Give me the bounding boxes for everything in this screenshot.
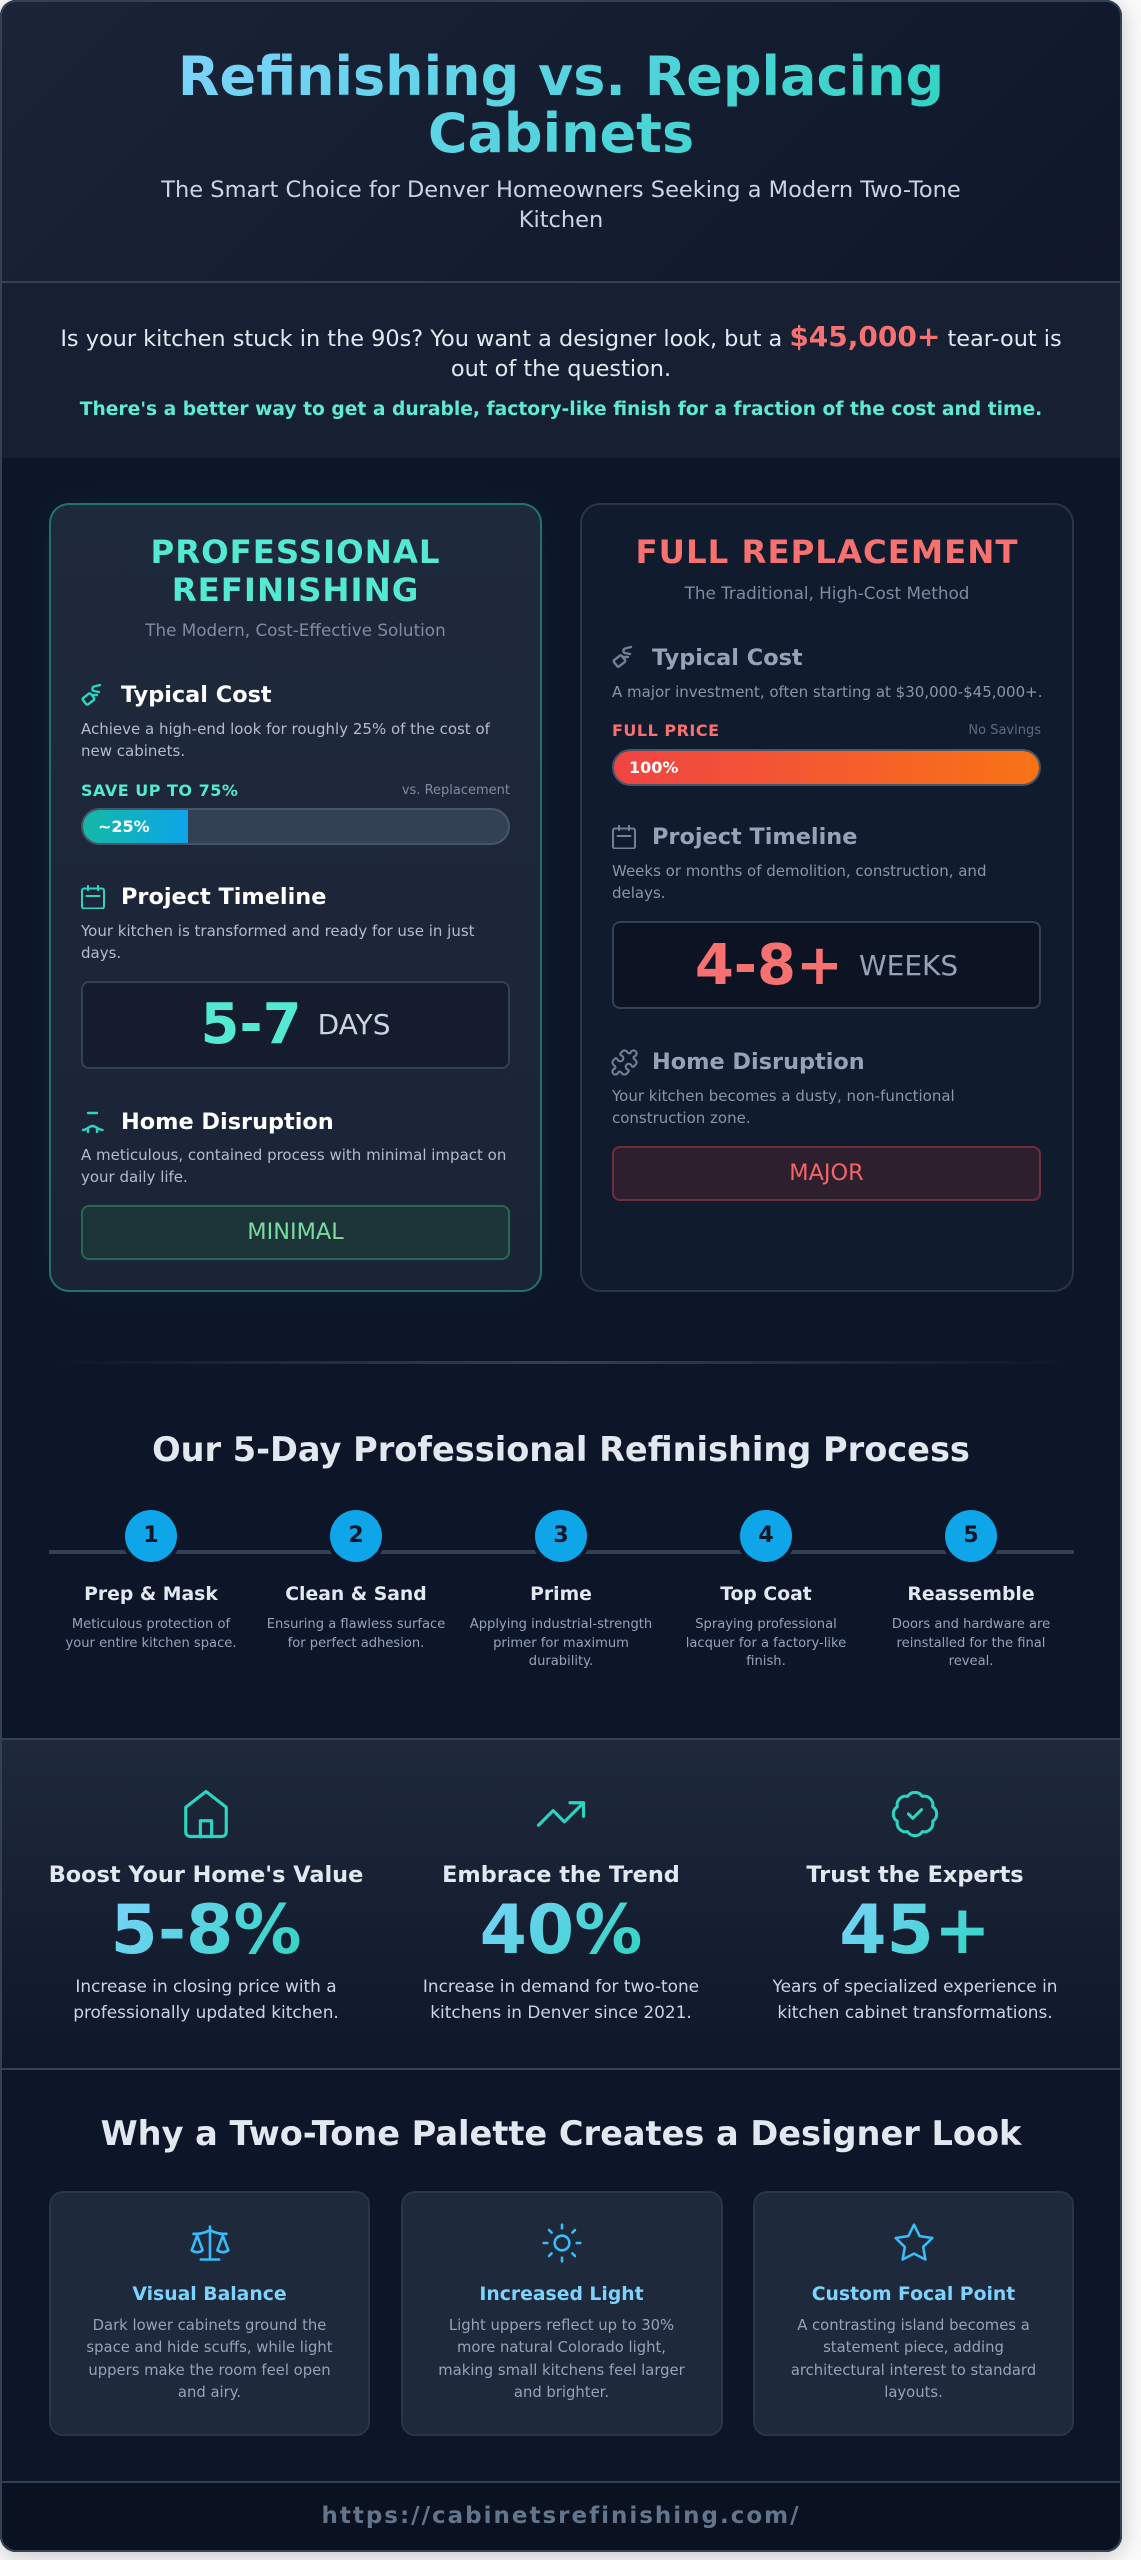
stat description [73,1976,339,2022]
step description: lacquer for a factory-like [686,1636,846,1651]
intro highlight: There's a better way to get a durable, factory-like finish for a fraction of the cost and time. [80,399,1042,420]
stat description: Years of specialized experience in [773,1976,1057,1996]
stat box: 4-8+ weeks: 4-8+ [695,932,843,998]
website url: https://cabinetsrefinishing.com/ [321,2503,801,2529]
step description: durability. [529,1654,593,1669]
description: Your kitchen becomes a dusty, non-functional [612,1087,955,1105]
description: Your kitchen is transformed and ready for use in just [81,922,475,940]
description: Weeks or months of demolition, construction, and [612,862,986,880]
title: Refinishing vs. Replacing [178,45,944,108]
stat description [423,1976,699,2022]
step title: Prime [530,1584,592,1605]
feature: home disruption [81,1109,510,1260]
icon: home [184,1790,228,1838]
heading: Home Disruption [121,1109,334,1135]
step description [267,1617,445,1651]
section heading: Why a Two-Tone Palette Creates a Designer Look [101,2114,1021,2153]
step 2 [267,1510,445,1651]
feature: home disruption [611,1049,1041,1201]
icon: calendar [81,885,105,909]
step number: 4 [758,1523,774,1548]
intro text [60,320,1062,382]
step description: reinstalled for the final [897,1636,1045,1651]
card heading: PROFESSIONAL [150,533,441,571]
description [81,922,475,962]
intro text: Is your kitchen stuck in the 90s? You want a designer look, but a $45,000+ tear-out is [60,320,1062,353]
stat description: kitchen cabinet transformations. [777,2002,1053,2022]
icon: calendar [612,825,636,849]
title [178,45,944,164]
card description: more natural Colorado light, [457,2339,666,2356]
progress bar: 25% [81,808,510,845]
subtitle: Kitchen [519,207,603,233]
description: A meticulous, contained process with minimal impact on [81,1146,506,1164]
subtitle [161,177,961,233]
step number: 5 [963,1523,979,1548]
step description: primer for maximum [493,1636,629,1651]
card description: A contrasting island becomes a [797,2317,1030,2334]
step description: reveal. [949,1654,993,1669]
title: Cabinets [428,102,694,164]
description [81,720,490,760]
card description: uppers make the room feel open [88,2362,331,2379]
stat box: 4-8+ weeks: WEEKS [859,948,958,982]
status: major [612,1146,1041,1201]
progress bar: 100% [612,749,1041,786]
feature: project timeline [612,824,1041,1009]
card: increased light [400,2191,722,2436]
step number [330,1510,382,1562]
step description: Spraying professional [695,1617,837,1632]
description: Achieve a high-end look for roughly 25% of the cost of [81,720,490,738]
step description [470,1617,652,1669]
step description: your entire kitchen space. [66,1636,236,1651]
stat description: kitchens in Denver since 2021. [430,2002,692,2022]
price label: FULL PRICE [612,721,720,740]
progress bar: 100%: 100% [629,758,678,777]
card description [755,2315,1072,2405]
status: minimal: MINIMAL [247,1219,344,1245]
card title: Increased Light [479,2284,644,2305]
description [81,1146,506,1186]
icon: puzzle [611,1049,638,1076]
card description [51,2315,368,2405]
footer [0,2481,1122,2552]
savings label: SAVE UP TO 75% [81,781,238,800]
card heading [150,533,441,609]
step number [535,1510,587,1562]
card description: architectural interest to standard [791,2362,1036,2379]
card description [402,2315,720,2405]
step description: finish. [746,1654,786,1669]
step description: Meticulous protection of [72,1617,230,1632]
step number [945,1510,997,1562]
step number [125,1510,177,1562]
heading: Typical Cost [121,682,272,708]
description: your daily life. [81,1168,188,1186]
step number [740,1510,792,1562]
icon: money [82,684,102,706]
stat description: Increase in demand for two-tone [423,1976,699,1996]
card heading: FULL REPLACEMENT [636,533,1018,571]
status: major: MAJOR [789,1160,864,1186]
stat: experience [745,1791,1085,2026]
stat value: 45+ [839,1891,991,1970]
comparison note: vs. Replacement [402,783,510,798]
step description [66,1617,236,1651]
stat box: 5-7 days [81,981,510,1069]
card description: Light uppers reflect up to 30% [449,2317,674,2334]
card description: statement piece, adding [823,2339,1004,2356]
stat box: 4-8+ weeks [612,921,1041,1009]
stat title: Embrace the Trend [442,1862,680,1888]
intro text: out of the question. [451,356,671,382]
description: A major investment, often starting at $30,000-$45,000+. [612,683,1042,701]
description: days. [81,944,121,962]
card subtitle: The Modern, Cost-Effective Solution [145,620,446,640]
step description [892,1617,1050,1669]
icon: scale [188,2221,232,2265]
step title: Clean & Sand [285,1584,427,1605]
icon: minimal disruption [82,1112,104,1134]
icon: money [612,646,632,668]
card: visual balance [49,2191,370,2436]
panel: professional refinishing [49,503,542,1292]
stat description: professionally updated kitchen. [73,2002,339,2022]
status: minimal [81,1205,510,1260]
heading: Project Timeline [652,824,857,850]
stat description [745,1973,1085,2025]
feature: project timeline [81,884,510,1069]
panel: two-tone palette [0,2070,1122,2482]
header panel [0,0,1122,282]
process heading: Our 5-Day Professional Refinishing Process [152,1430,970,1469]
stat box: 5-7 days: 5-7 [200,992,302,1057]
step number: 3 [553,1523,569,1548]
card title: Visual Balance [132,2284,287,2305]
card description: making small kitchens feel larger [438,2362,685,2379]
step number: 2 [348,1523,364,1548]
stat box: 5-7 days: DAYS [318,1008,391,1041]
description: construction zone. [612,1109,751,1127]
stat value: 5-8% [110,1891,301,1970]
card: custom focal point [753,2191,1074,2436]
panel: full replacement [580,503,1074,1292]
card subtitle: The Traditional, High-Cost Method [685,583,969,603]
feature: typical cost [81,682,510,845]
step number: 1 [143,1523,159,1548]
intro panel [0,281,1122,458]
stat description: Increase in closing price with a [75,1976,337,1996]
progress bar: 25%: ~25% [98,817,150,836]
card description: layouts. [884,2384,943,2401]
description: delays. [612,884,666,902]
stat title: Trust the Experts [806,1862,1024,1888]
step description: Applying industrial-strength [470,1617,652,1632]
icon: sun [540,2221,584,2265]
stat: two-tone trend [423,1801,699,2022]
step 4 [686,1510,846,1669]
step title: Reassemble [907,1584,1035,1605]
step description: for perfect adhesion. [288,1636,424,1651]
step 1 [66,1510,236,1651]
description [612,862,986,902]
step title: Top Coat [720,1584,812,1605]
card heading: REFINISHING [172,571,419,609]
stat: home value [49,1790,363,2022]
step 3 [470,1510,652,1669]
heading: Typical Cost [652,645,803,671]
heading: Project Timeline [121,884,326,910]
card title: Custom Focal Point [812,2284,1015,2305]
stat title: Boost Your Home's Value [49,1862,363,1888]
icon: badge check [889,1788,941,1840]
feature: typical cost [612,645,1042,786]
step description: Doors and hardware are [892,1617,1050,1632]
panel: stats [0,1738,1122,2070]
description [612,1087,955,1127]
icon: trending up [536,1801,586,1827]
card description: and airy. [178,2384,241,2401]
description: new cabinets. [81,742,185,760]
step description [686,1617,846,1669]
step 5 [892,1510,1050,1669]
card description: space and hide scuffs, while light [86,2339,333,2356]
stat value: 40% [480,1891,642,1970]
card description: and brighter. [514,2384,609,2401]
icon: star [892,2221,936,2265]
step description: Ensuring a flawless surface [267,1617,445,1632]
step title: Prep & Mask [84,1584,218,1605]
process timeline [49,1550,1074,1554]
savings note: No Savings [968,723,1041,738]
heading: Home Disruption [652,1049,865,1075]
subtitle: The Smart Choice for Denver Homeowners Seeking a Modern Two-Tone [161,177,961,203]
card description: Dark lower cabinets ground the [93,2317,326,2334]
